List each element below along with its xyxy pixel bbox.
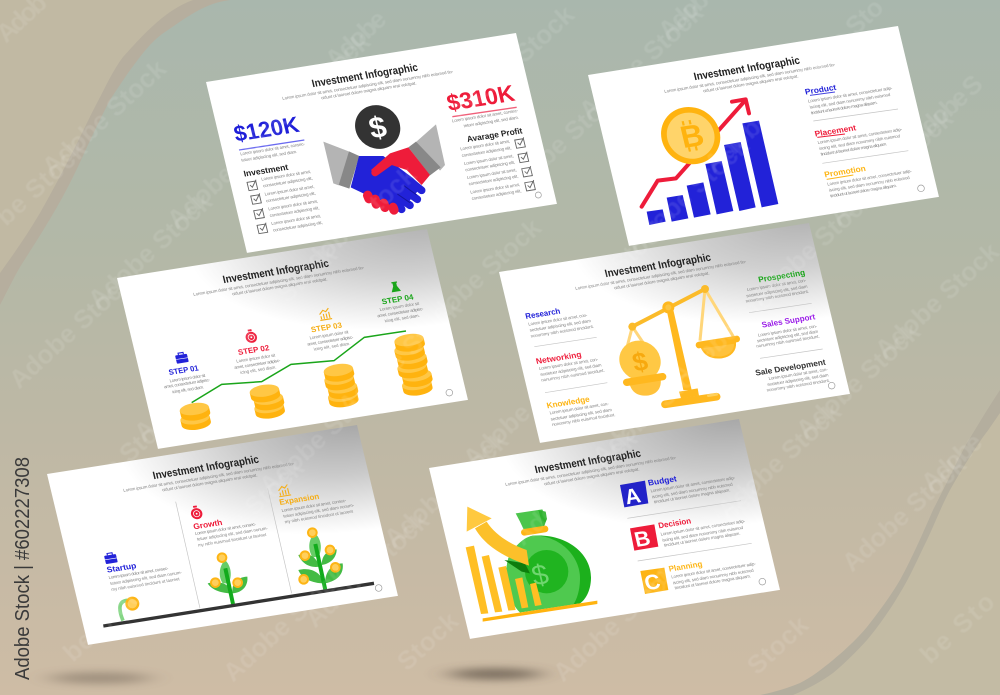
slide card <box>499 223 850 443</box>
watermarks: Adobe <box>915 427 988 497</box>
slide heading <box>661 49 838 99</box>
big number: investment: $120K <box>231 112 302 147</box>
watermarks: Adobe Stock <box>790 316 926 444</box>
slide content <box>466 474 766 622</box>
item: sales support <box>756 312 820 349</box>
item: placement: Lorem ipsum dolor sit amet, consectetuer adip- <box>817 127 903 145</box>
slide content <box>524 268 835 427</box>
icon: handshake <box>323 124 445 212</box>
coin stack 4 <box>393 332 434 398</box>
watermarks: Adobe Stock <box>444 0 580 127</box>
item: budget: iscing elit, sed diam nonummy nibh euismod <box>651 482 734 499</box>
bar chart <box>647 121 778 225</box>
slide heading: cidunt ut laoreet dolore magna aliquam erat volutpat. <box>162 472 258 492</box>
item: sale development: sectetuer adipiscing elit, sed diam <box>767 372 829 387</box>
step 02: icing elit, sed diam. <box>240 364 277 375</box>
item: growth: Lorem ipsum dolor sit amet, consec- <box>194 521 257 536</box>
checklist: investment: consectetuer adipiscing elit, <box>269 205 320 218</box>
slide heading: Investment Infographic <box>222 258 330 286</box>
page number badge <box>759 578 766 585</box>
item: sale development: Lorem ipsum dolor sit amet, con- <box>768 367 829 381</box>
icon: briefcase <box>104 552 118 564</box>
item: sales support: nonummy nibh euismod tincidunt. <box>756 334 820 349</box>
watermarks: be Sto <box>914 587 1000 669</box>
watermarks: Adobe Stock <box>299 505 435 633</box>
step 01 <box>163 352 211 394</box>
checklist: investment: Lorem ipsum dolor sit amet, <box>268 199 318 211</box>
step 04: icing elit, sed diam. <box>384 313 420 323</box>
background wave: top left fill <box>0 0 193 273</box>
item: expansion: my nibh euismod tincidunt ut laoreet <box>284 509 354 524</box>
item: prospecting: Lorem ipsum dolor sit amet, con- <box>746 278 807 292</box>
badge C: C <box>642 569 663 595</box>
checklist: avarage profit: Lorem ipsum dolor sit amet, <box>460 139 510 151</box>
step 02: amet, consectetuer adipisc- <box>234 358 281 370</box>
slide heading: Investment Infographic <box>604 252 712 280</box>
item: expansion <box>277 484 355 524</box>
slide heading: Lorem ipsum dolor sit amet, consectetuer adipiscing elit, sed diam nonummy nibh euismod tin- <box>575 259 747 291</box>
item: growth: my nibh euismod tincidunt ut laoreet <box>197 532 268 548</box>
step 03: amet, consectetuer adipisc- <box>307 334 354 347</box>
badge A: A <box>622 483 643 509</box>
icon: bitcoin coin <box>655 103 726 168</box>
page number badge <box>446 389 453 396</box>
item: sale development <box>754 358 830 393</box>
floor shadow centre <box>449 668 541 680</box>
slide heading: cidunt ut laoreet dolore magna aliquam erat volutpat. <box>703 73 799 93</box>
item: networking <box>535 350 605 383</box>
watermarks: Adobe Stock <box>411 212 547 340</box>
slide heading: Investment Infographic <box>693 55 801 83</box>
watermarks: Adobe Stock <box>36 53 172 181</box>
item: sale development: nonummy nibh euismod tincidunt. <box>766 378 830 393</box>
watermarks: Adobe Stock <box>217 559 353 687</box>
item: networking: Lorem ipsum dolor sit amet, con- <box>538 357 599 371</box>
panel: balance scale slide <box>499 223 850 443</box>
item: startup: Lorem ipsum dolor sit amet, consec- <box>108 566 169 580</box>
item: research <box>524 307 594 339</box>
item: promotion: tincidunt ut laoreet dolore magna aliquam. <box>830 183 897 198</box>
watermarks: Adobe Stock <box>698 50 834 178</box>
checklist: avarage profit <box>460 137 536 201</box>
checklist: investment <box>247 169 323 234</box>
watermarks: Stock <box>741 609 815 680</box>
panel: bitcoin growth slide <box>588 26 939 246</box>
slide content <box>231 80 541 234</box>
watermarks: Adobe Stock <box>836 449 972 577</box>
plant: expansion <box>298 527 343 590</box>
item: research: Research <box>524 307 561 321</box>
item: growth: tetuer adipiscing elit, sed diam nonum- <box>196 526 269 542</box>
item: placement: tincidunt ut laoreet dolore magna aliquam. <box>820 141 888 157</box>
item: product: Product <box>804 83 837 97</box>
item: knowledge <box>546 395 616 427</box>
watermarks: Adobe Stock <box>3 266 139 394</box>
watermarks: Adobe Stock <box>286 159 422 287</box>
item: prospecting <box>745 268 809 304</box>
item: promotion: Lorem ipsum dolor sit amet, consectetuer adip- <box>827 168 913 187</box>
watermarks: Adobe Stock <box>128 319 264 447</box>
item: planning: iscing elit, sed diam nonummy nibh euismod <box>672 568 755 585</box>
item: product: Lorem ipsum dolor sit amet, consectetuer adip- <box>807 85 893 104</box>
item: sales support: sectetuer adipiscing elit, sed diam <box>756 329 819 343</box>
coin stack 2 <box>248 383 286 421</box>
slide heading <box>190 252 367 302</box>
checklist: investment: consectetuer adipiscing elit, <box>265 191 316 203</box>
checklist: avarage profit: Lorem ipsum dolor sit amet, <box>470 182 520 195</box>
checklist: investment: consectetuer adipiscing elit, <box>272 220 323 233</box>
watermarks: Adobe Stock <box>161 106 297 234</box>
item: expansion: Lorem ipsum dolor sit amet, consec- <box>281 498 347 513</box>
slide heading: Lorem ipsum dolor sit amet, consectetuer adipiscing elit, sed diam nonummy nibh euismod tin- <box>505 455 677 487</box>
checklist: avarage profit: Lorem ipsum dolor sit amet, <box>466 167 517 180</box>
slide card <box>206 33 557 253</box>
item: budget: tincidunt ut laoreet dolore magna aliquam. <box>653 487 731 504</box>
slide card <box>429 419 780 639</box>
item: product: tincidunt ut laoreet dolore magna aliquam. <box>810 100 878 115</box>
slide heading: Investment Infographic <box>534 448 642 476</box>
checklist: investment: consectetuer adipiscing elit, <box>262 176 313 188</box>
floor shadow left <box>50 672 150 684</box>
icon: stopwatch <box>189 505 204 520</box>
ground line <box>103 583 374 626</box>
caption: profit: Lorem ipsum dolor sit amet, consec- <box>451 108 519 123</box>
step 04: STEP 04 <box>381 292 415 306</box>
item: placement: Placement <box>814 123 857 139</box>
item: prospecting: nonummy nibh euismod tincidunt. <box>745 289 809 304</box>
plant: sprout <box>120 597 139 621</box>
item: research: nonummy nibh euismod tincidunt. <box>530 324 594 339</box>
item: knowledge: Knowledge <box>546 395 591 410</box>
heading: investment: Investment <box>242 162 289 179</box>
page number badge <box>375 585 382 591</box>
step 02: STEP 02 <box>237 343 271 357</box>
watermarks: Adobe Stock <box>240 26 376 154</box>
item: prospecting: sectetuer adipiscing elit, sed diam <box>746 284 808 298</box>
checklist: investment: Lorem ipsum dolor sit amet, <box>271 213 321 226</box>
slide heading: Lorem ipsum dolor sit amet, consectetuer adipiscing elit, sed diam nonummy nibh euismod tin- <box>123 461 295 493</box>
slide heading: cidunt ut laoreet dolore magna aliquam erat volutpat. <box>614 270 710 290</box>
slide card <box>117 229 468 449</box>
item: product: iscing elit, sed diam nonummy nibh euismod <box>809 92 891 110</box>
checklist: avarage profit: consectetuer adipiscing elit, <box>471 188 522 201</box>
watermarks: Adobe Stock <box>253 372 389 500</box>
step 04: Lorem ipsum dolor sit <box>379 301 420 312</box>
icon: dollar coin: $ <box>366 111 390 145</box>
item: research: sectetuer adipiscing elit, sed diam <box>529 318 592 333</box>
slide heading <box>279 56 456 106</box>
slide heading: Lorem ipsum dolor sit amet, consectetuer adipiscing elit, sed diam nonummy nibh euismod tin- <box>664 62 836 94</box>
slide heading: Investment Infographic <box>152 454 260 482</box>
item: growth: Growth <box>192 518 223 531</box>
icon: briefcase <box>175 352 189 364</box>
watermarks: Adobe <box>319 4 392 74</box>
slide heading <box>502 442 679 492</box>
watermarks: Adobe Stock <box>174 452 310 580</box>
icon: balance scale: $ <box>629 346 651 377</box>
page number badge <box>918 185 924 192</box>
step 03 <box>307 308 354 352</box>
slide card <box>47 425 398 645</box>
item: planning: Lorem ipsum dolor sit amet, consectetuer adip- <box>671 561 757 579</box>
checklist: investment: Lorem ipsum dolor sit amet, <box>264 184 315 197</box>
badge B: B <box>632 526 653 552</box>
item: planning <box>640 560 757 595</box>
big number: profit: $310K <box>444 80 517 116</box>
checklist: avarage profit: consectetuer adipiscing elit, <box>461 145 512 158</box>
watermarks: Adobe Stock <box>82 186 218 314</box>
item: placement: iscing elit, sed diam nonummy nibh euismod <box>819 133 901 151</box>
step 01: STEP 01 <box>168 363 200 377</box>
icon: dollar coin <box>350 102 405 152</box>
watermarks: Adobe Stock <box>573 0 709 125</box>
item: decision <box>630 516 746 552</box>
watermarks: Adobe Stock <box>207 239 343 367</box>
item: prospecting: Prospecting <box>757 268 806 284</box>
icon: stopwatch <box>244 329 258 344</box>
item: planning: tincidunt ut laoreet dolore magna aliquam. <box>674 573 751 590</box>
watermarks: Adobe Stock <box>665 263 801 391</box>
watermarks: Adobe Stock <box>744 183 880 311</box>
item: knowledge: nonummy nibh euismod tincidunt. <box>551 412 616 427</box>
slide content <box>103 484 382 626</box>
item: sales support: Sales Support <box>761 312 816 330</box>
watermarks: Adobe Stock <box>332 292 468 420</box>
watermarks: Adobe Stock <box>457 345 593 473</box>
caption: profit: tetuer adipiscing elit, sed diam. <box>463 115 519 128</box>
icon: money bag <box>506 509 591 612</box>
item: startup: tetuer adipiscing elit, sed diam nonum- <box>110 570 183 586</box>
checklist: avarage profit: consectetuer adipiscing elit, <box>465 160 515 172</box>
step 04 <box>377 281 424 323</box>
plant: growth <box>208 552 247 604</box>
item: startup: my nibh euismod tincidunt ut laoreet <box>111 576 181 592</box>
watermarks: Stock <box>391 605 465 676</box>
item: budget: Lorem ipsum dolor sit amet, consectetuer adip- <box>650 475 736 493</box>
item: networking: sectetuer adipiscing elit, sed diam <box>540 362 602 377</box>
panel: steps slide <box>117 229 468 449</box>
icon: balance scale <box>615 285 737 404</box>
underline red <box>452 107 517 117</box>
icon: money bag: $ <box>529 559 552 592</box>
watermarks: Adobe Stock <box>586 343 722 471</box>
watermarks: Adobe Stock <box>632 476 768 604</box>
slide card <box>588 26 939 246</box>
step 01: amet, consectetuer adipisc- <box>163 377 211 389</box>
stock id label: Adobe Stock | #602227308 <box>12 457 34 680</box>
item: research: Lorem ipsum dolor sit amet, con- <box>528 312 588 327</box>
step 02 <box>234 329 281 375</box>
icon: chart <box>277 484 291 497</box>
slide content <box>642 83 924 225</box>
step 03: Lorem ipsum dolor sit <box>309 329 350 340</box>
line chart: green trend <box>192 331 406 403</box>
watermarks: Adobe Stock <box>619 130 755 258</box>
watermarks: Adobe Stock <box>547 559 683 687</box>
item: budget: Budget <box>647 474 678 488</box>
watermarks: Adobe Stock <box>711 396 847 524</box>
item: sales support: Lorem ipsum dolor sit amet, con- <box>757 323 818 338</box>
item: decision: iscing elit, sed diam nonummy nibh euismod <box>662 525 744 543</box>
step 03: icing elit, sed diam. <box>313 341 351 352</box>
watermarks: Adobe Stock <box>49 399 185 527</box>
slide content <box>163 281 453 432</box>
item: knowledge: Lorem ipsum dolor sit amet, con- <box>549 401 610 415</box>
panel: handshake slide <box>206 33 557 253</box>
item: knowledge: sectetuer adipiscing elit, sed diam <box>550 407 613 422</box>
item: product <box>804 83 893 115</box>
item: decision: Decision <box>657 516 692 530</box>
watermarks: Adobe Stock <box>494 77 630 205</box>
item: networking: nonummy nibh euismod tincidunt. <box>541 368 605 383</box>
icon: flask <box>389 281 401 292</box>
panel: growth plants slide <box>47 425 398 645</box>
slide heading: cidunt ut laoreet dolore magna aliquam erat volutpat. <box>232 276 328 296</box>
item: budget <box>620 474 736 509</box>
slide heading: Investment Infographic <box>311 62 419 90</box>
icon: chart <box>318 308 332 320</box>
item: planning: Planning <box>668 560 703 574</box>
watermarks: Adobe Stock <box>378 425 514 553</box>
arrow: rising yellow <box>467 507 530 573</box>
slide heading: cidunt ut laoreet dolore magna aliquam erat volutpat. <box>321 80 417 100</box>
caption: investment <box>240 141 306 163</box>
checklist: investment: Lorem ipsum dolor sit amet, <box>261 169 311 182</box>
underline blue <box>239 140 304 150</box>
item: promotion <box>823 164 913 198</box>
caption: investment: Lorem ipsum dolor sit amet, consec- <box>240 141 306 156</box>
icon: bitcoin coin: B <box>677 117 707 155</box>
checklist: avarage profit: Lorem ipsum dolor sit amet, <box>463 153 514 166</box>
slide heading: Lorem ipsum dolor sit amet, consectetuer adipiscing elit, sed diam nonummy nibh euismod tin- <box>193 265 365 297</box>
step 02: Lorem ipsum dolor sit <box>236 353 276 364</box>
watermarks: be Stock <box>57 569 160 667</box>
checklist: avarage profit: consectetuer adipiscing elit, <box>468 174 519 186</box>
item: growth <box>189 505 269 548</box>
item: expansion: Expansion <box>278 492 320 507</box>
item: placement <box>814 123 903 157</box>
background wave: bottom right fill <box>793 413 1000 695</box>
slide heading <box>572 246 749 296</box>
background wave: top left band <box>0 0 230 305</box>
item: decision: Lorem ipsum dolor sit amet, consectetuer adip- <box>660 518 746 537</box>
item: startup: Startup <box>106 561 137 575</box>
step 01: icing elit, sed diam. <box>172 384 205 394</box>
panel: money bag slide <box>429 419 780 639</box>
watermarks: Adobe Stock <box>507 423 643 551</box>
item: sale development: Sale Development <box>754 358 827 378</box>
slide heading <box>120 448 297 498</box>
coin stack 3 <box>322 362 360 409</box>
caption: investment: tetuer adipiscing elit, sed diam. <box>241 149 298 163</box>
background wave: bottom right band <box>760 390 1000 695</box>
page number badge <box>828 382 835 389</box>
watermarks: Adobe Stock <box>540 210 676 338</box>
slide heading: cidunt ut laoreet dolore magna aliquam erat volutpat. <box>544 466 640 486</box>
item: promotion: iscing elit, sed diam nonummy nibh euismod <box>828 175 911 193</box>
watermarks: Adobe S <box>902 69 988 151</box>
item: startup <box>104 552 183 592</box>
coin stack 1 <box>178 401 212 432</box>
watermarks: Adobe Stock <box>823 103 959 231</box>
slide heading: Lorem ipsum dolor sit amet, consectetuer adipiscing elit, sed diam nonummy nibh euismod tin- <box>282 69 454 101</box>
step 04: amet, consectetuer adipisc- <box>377 306 424 318</box>
item: expansion: tetuer adipiscing elit, sed diam nonum- <box>283 503 355 519</box>
item: networking: Networking <box>535 350 582 366</box>
step 03: STEP 03 <box>310 321 343 334</box>
item: decision: tincidunt ut laoreet dolore magna aliquam. <box>663 531 741 548</box>
heading: avarage profit: Avarage Profit <box>466 125 523 144</box>
arrow: rising red line <box>642 99 749 207</box>
bar chart: yellow <box>466 546 597 622</box>
item: promotion: Promotion <box>823 164 867 179</box>
page number badge <box>535 192 541 198</box>
step 01: Lorem ipsum dolor sit <box>169 373 207 383</box>
